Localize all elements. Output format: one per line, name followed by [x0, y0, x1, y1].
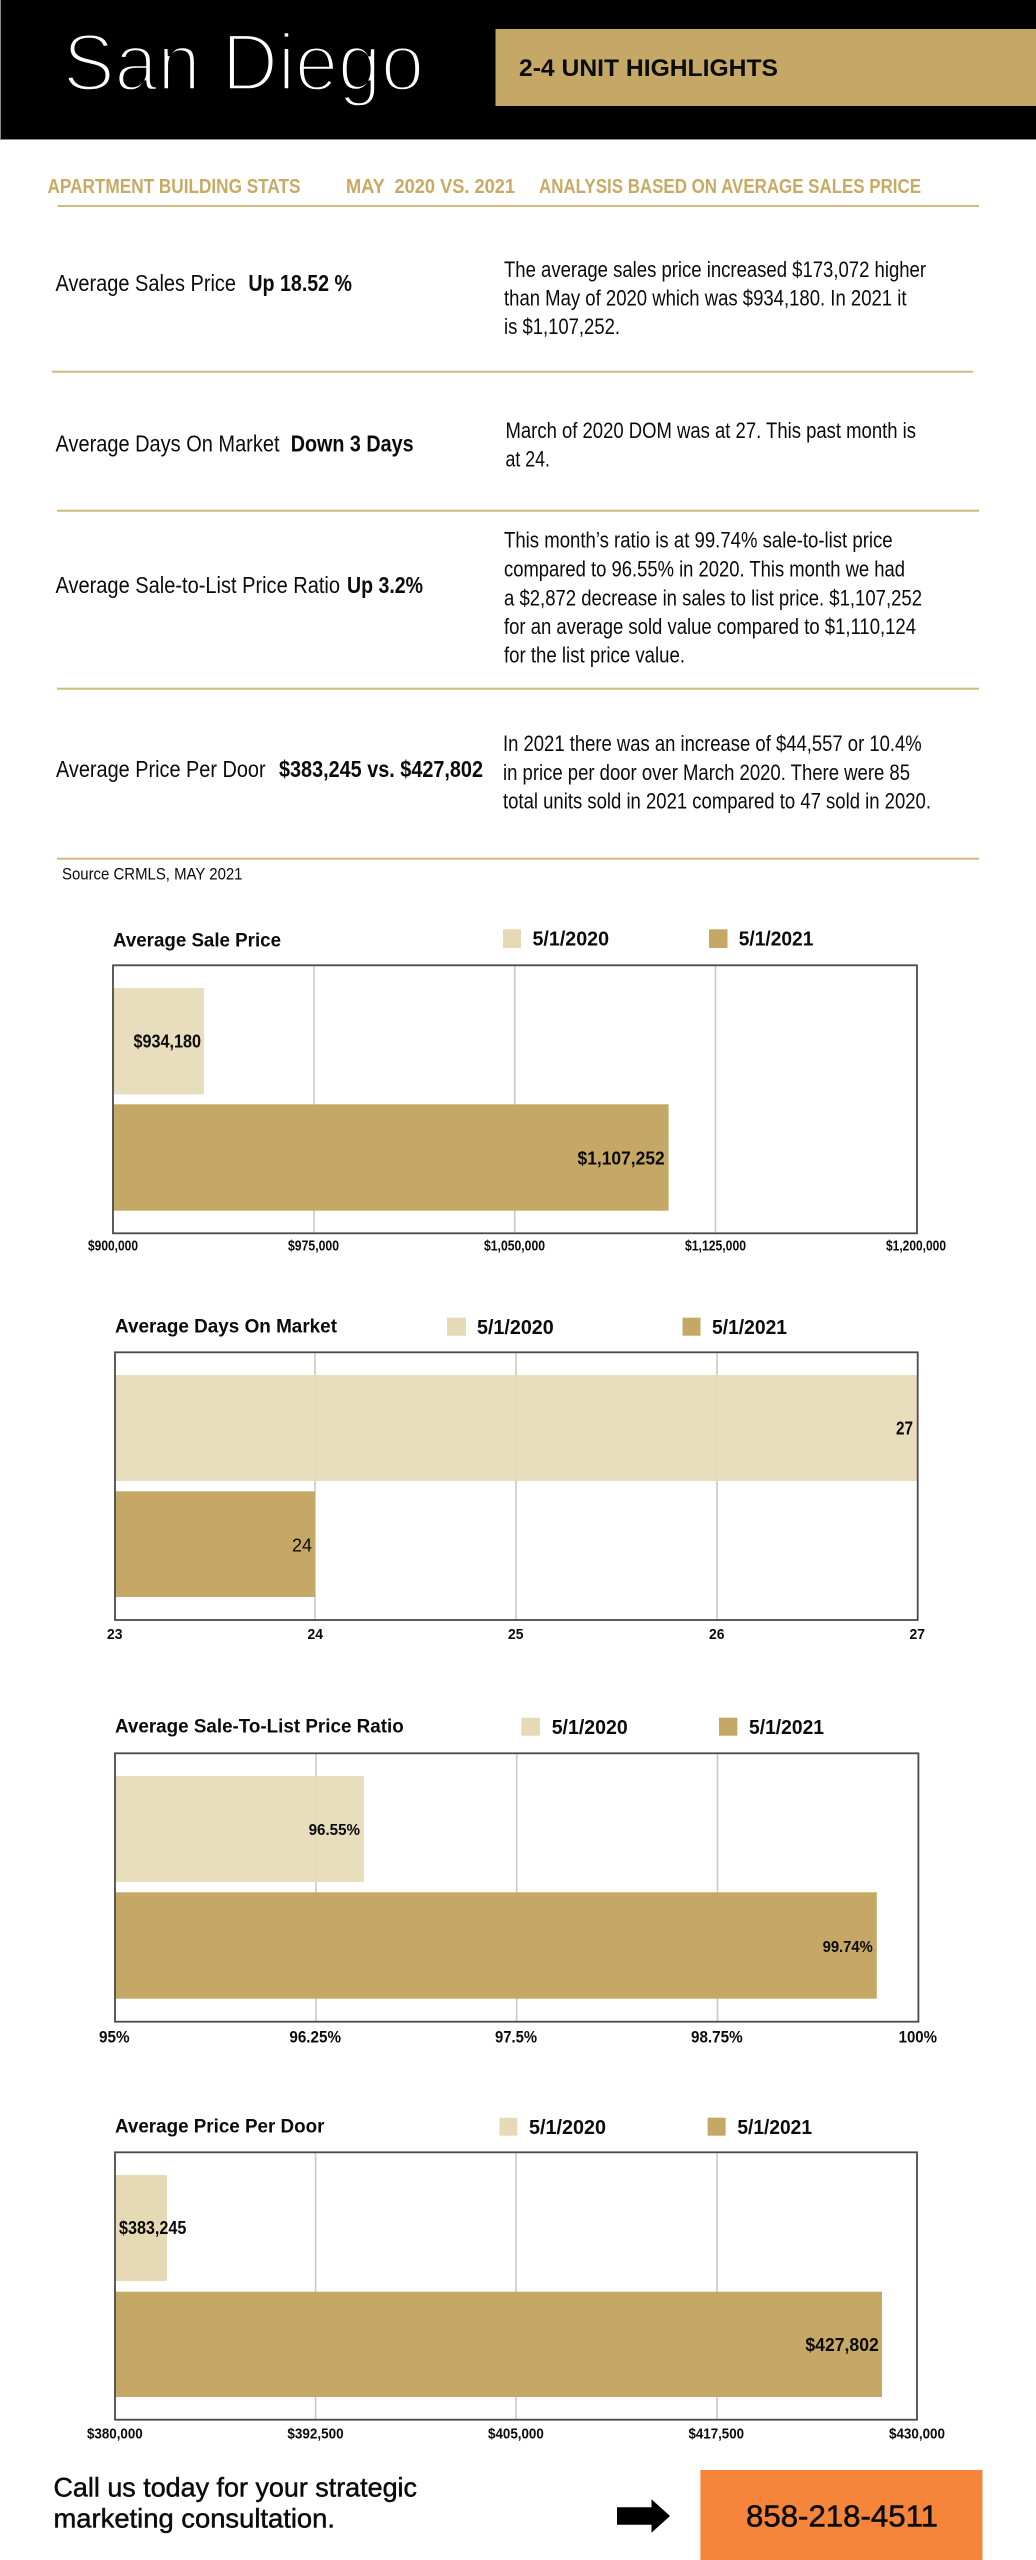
chart: average price per door [87, 2116, 945, 2443]
bar value labels [292, 1418, 913, 1556]
axis labels: 27 [910, 1626, 925, 1643]
call to action text: marketing consultation. [54, 2503, 335, 2533]
stat: average price per door [56, 731, 931, 814]
axis labels: $392,500 [287, 2426, 344, 2443]
axis labels: $430,000 [889, 2426, 945, 2443]
stat: average sales price: than May of 2020 which was $934,180. In 2021 it [504, 286, 906, 310]
axis labels: 96.25% [289, 2027, 341, 2046]
subheading row: ANALYSIS BASED ON AVERAGE SALES PRICE [539, 176, 921, 198]
axis labels [99, 2027, 937, 2046]
axis labels: 24 [308, 1626, 324, 1643]
legend: 5/1/2020 [529, 2117, 606, 2139]
bar: 5/1/2021 [113, 1104, 669, 1211]
bar value labels: $383,245 [119, 2218, 186, 2238]
stat: average sales price: Average Sales Price [56, 270, 236, 296]
subheading row: MAY 2020 VS. 2021 [346, 176, 515, 198]
bar value labels [309, 1822, 873, 1956]
bar: 5/1/2020 [115, 2175, 167, 2281]
stat: average days on market: Average Days On Market [56, 431, 280, 457]
axis labels: 95% [99, 2027, 130, 2046]
stat: average sales price: is $1,107,252. [504, 314, 620, 339]
axis labels: 100% [899, 2027, 937, 2046]
bar value labels: 96.55% [309, 1822, 360, 1839]
stat: average sales price [56, 257, 926, 339]
legend: 5/1/2021 [739, 929, 813, 951]
chart title: Average Days On Market [115, 1316, 338, 1337]
bar: 5/1/2020 [115, 1375, 918, 1481]
legend [500, 2117, 812, 2139]
axis labels: $1,125,000 [685, 1238, 746, 1255]
banner: 2-4 unit highlights [496, 29, 1036, 106]
bar value labels: 24 [292, 1536, 312, 1556]
axis labels: 98.75% [691, 2027, 743, 2046]
chart title: Average Price Per Door [115, 2116, 325, 2137]
legend [503, 929, 813, 951]
chart: average sale-to-list price ratio [99, 1717, 937, 2046]
legend: 5/1/2021 [749, 1717, 824, 1739]
bar: 5/1/2021 [115, 1892, 877, 1999]
axis labels: $417,500 [688, 2426, 744, 2443]
stat: average sale-to-list price ratio: for the list price value. [504, 643, 685, 668]
icon: arrow [617, 2499, 670, 2533]
stat: average days on market [56, 418, 916, 472]
stat: average sale-to-list price ratio: This month’s ratio is at 99.74% sale-to-list price [504, 528, 893, 553]
axis labels: $405,000 [488, 2426, 544, 2443]
source note: Source CRMLS, MAY 2021 [62, 864, 242, 883]
axis labels: $380,000 [87, 2426, 143, 2443]
call to action text [54, 2473, 417, 2533]
chart title: Average Sale Price [113, 931, 281, 952]
bar value labels: $1,107,252 [578, 1148, 665, 1168]
stat: average days on market: at 24. [506, 447, 550, 472]
chart: average days on market [107, 1316, 925, 1643]
subheading row [48, 176, 921, 198]
bar: 5/1/2020 [115, 1776, 364, 1882]
chart: average sale price [88, 929, 946, 1255]
legend: 5/1/2020 [532, 929, 609, 951]
header band [0, 0, 1036, 140]
subheading row: APARTMENT BUILDING STATS [48, 176, 300, 198]
stat: average sale-to-list price ratio: for an average sold value compared to $1,110,124 [504, 614, 916, 639]
stat: average days on market: Down 3 Days [291, 431, 414, 457]
legend: 5/1/2021 [712, 1317, 787, 1339]
bar value labels: $934,180 [134, 1031, 201, 1051]
axis labels: $1,050,000 [484, 1238, 545, 1255]
bar value labels: 99.74% [823, 1939, 873, 1956]
stat: average price per door: $383,245 vs. $427,802 [279, 756, 483, 782]
bar: 5/1/2021 [115, 1491, 315, 1597]
banner: 2-4 unit highlights: 2-4 UNIT HIGHLIGHTS [519, 55, 778, 82]
axis labels [107, 1626, 925, 1643]
stat: average sales price: The average sales price increased $173,072 higher [504, 257, 926, 282]
axis labels [88, 1238, 946, 1255]
axis labels [87, 2426, 945, 2443]
chart title: Average Sale-To-List Price Ratio [115, 1717, 404, 1738]
axis labels: 97.5% [495, 2027, 537, 2046]
stat: average sale-to-list price ratio [56, 528, 922, 668]
bar: 5/1/2020 [113, 988, 204, 1094]
stat: average sale-to-list price ratio: a $2,872 decrease in sales to list price. $1,107,252 [504, 585, 922, 610]
stat: average price per door: In 2021 there was an increase of $44,557 or 10.4% [503, 731, 922, 756]
bar: 5/1/2021 [115, 2292, 882, 2397]
legend: 5/1/2020 [477, 1317, 554, 1339]
stat: average price per door: total units sold in 2021 compared to 47 sold in 2020. [503, 789, 931, 814]
stat: average sale-to-list price ratio: Up 3.2% [347, 572, 423, 598]
stat: average sale-to-list price ratio: Average Sale-to-List Price Ratio [56, 572, 340, 598]
call to action text: Call us today for your strategic [54, 2473, 417, 2503]
stat: average sales price: Up 18.52 % [248, 270, 352, 296]
title: San Diego: San Diego [63, 18, 424, 108]
stat: average sale-to-list price ratio: compared to 96.55% in 2020. This month we had [504, 556, 905, 582]
axis labels: $975,000 [288, 1238, 339, 1255]
axis labels: $1,200,000 [886, 1238, 946, 1255]
phone box [700, 2470, 982, 2560]
stat: average days on market: March of 2020 DOM was at 27. This past month is [506, 418, 916, 443]
bar value labels: $427,802 [805, 2335, 879, 2355]
bar value labels [134, 1031, 665, 1168]
legend [447, 1317, 787, 1339]
axis labels: 25 [508, 1626, 524, 1643]
phone box: 858-218-4511 [746, 2499, 938, 2534]
axis labels: 23 [107, 1626, 122, 1643]
axis labels: $900,000 [88, 1238, 138, 1255]
legend: 5/1/2021 [737, 2117, 812, 2139]
stat: average price per door: Average Price Per Door [56, 756, 266, 782]
bar value labels [119, 2218, 879, 2355]
stat: average price per door: in price per door over March 2020. There were 85 [503, 760, 910, 785]
legend: 5/1/2020 [552, 1717, 628, 1739]
legend [521, 1717, 824, 1739]
axis labels: 26 [709, 1626, 724, 1643]
bar value labels: 27 [896, 1418, 913, 1438]
